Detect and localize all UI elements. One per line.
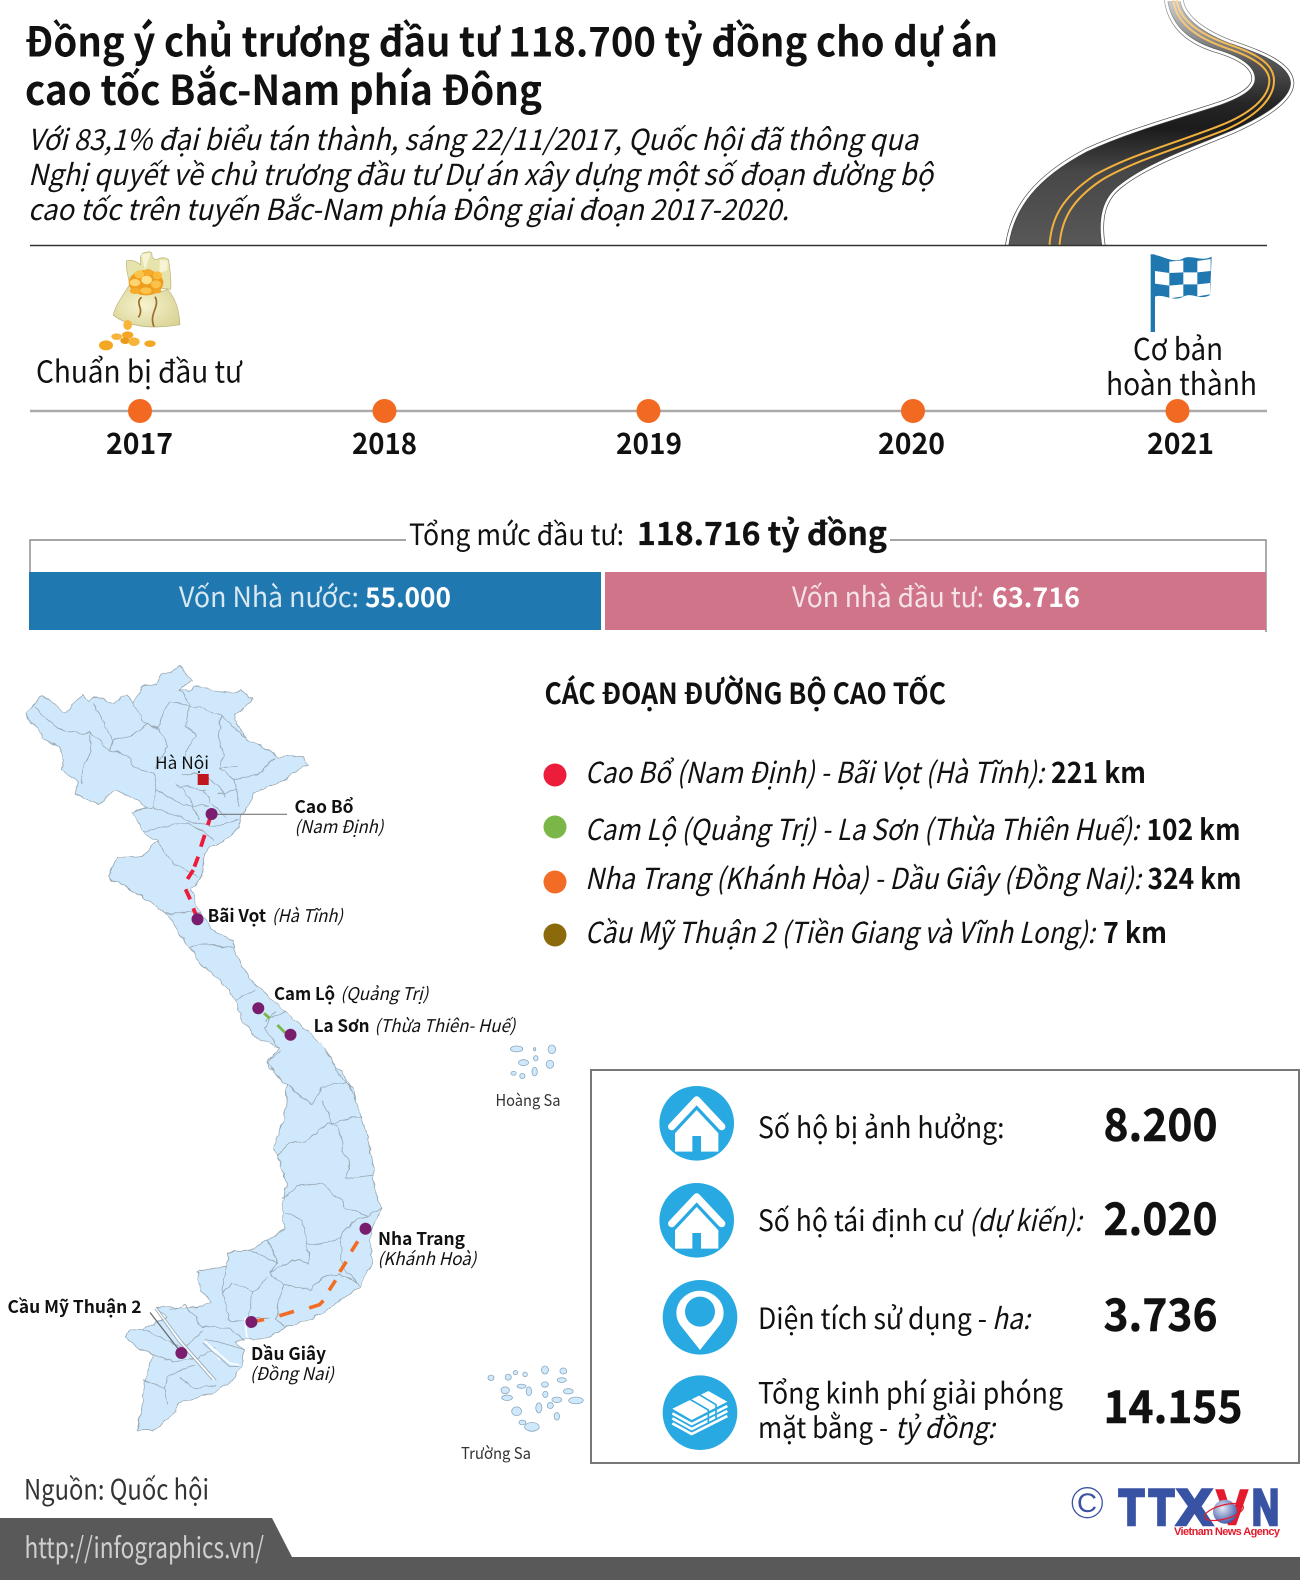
icon: house — [659, 1183, 734, 1258]
label: Hoàng Sa: Hoàng Sa — [496, 1087, 560, 1111]
row: resettled households: Số hộ tái định cư — [758, 1198, 964, 1240]
logo: TTXVN: N — [1252, 1479, 1279, 1535]
timeline dot 2020 — [901, 399, 925, 423]
route: Cam Lộ - La Sơn — [264, 1013, 285, 1033]
copyright mark: C — [1077, 1488, 1097, 1518]
year labels: 2019 — [616, 421, 682, 463]
bar: investor capital: 63.716 — [992, 576, 1080, 615]
Dầu Giây marker — [245, 1316, 335, 1386]
source: Nguồn: Quốc hội — [24, 1468, 209, 1508]
Dầu Giây marker: (Đồng Nai) — [250, 1361, 335, 1386]
Dầu Giây marker: Dầu Giây — [251, 1341, 326, 1366]
map of Vietnam — [8, 666, 583, 1464]
section 1: Cao Bổ (Nam Định) - Bãi Vọt (Hà Tĩnh): — [585, 750, 1046, 792]
Trường Sa islands — [488, 1366, 583, 1431]
year labels: 2018 — [352, 421, 417, 463]
timeline — [30, 399, 1267, 463]
row: clearance cost: tỷ đồng: — [895, 1405, 997, 1447]
row: land area: ha: — [992, 1296, 1032, 1338]
Bãi Vọt marker: (Hà Tĩnh) — [272, 903, 344, 928]
total investment — [29, 509, 1266, 632]
intro text: Nghị quyết về chủ trương đầu tư Dự án xây dựng một số đoạn đường bộ — [28, 152, 935, 194]
map south — [124, 1043, 583, 1431]
logo: TTXVN — [1072, 1479, 1281, 1538]
row: clearance cost: mặt bằng - — [758, 1405, 888, 1447]
Nha Trang marker — [360, 1223, 478, 1271]
logo: TTXVN: Vietnam News Agency — [1174, 1526, 1281, 1538]
row: affected households: Số hộ bị ảnh hưởng: — [758, 1105, 1004, 1147]
icon: house — [659, 1086, 734, 1161]
bar: state capital: Vốn Nhà nước: — [179, 576, 359, 616]
section 3: Nha Trang (Khánh Hòa) - Dầu Giây (Đồng Nai): — [585, 856, 1143, 898]
Nha Trang marker: (Khánh Hoà) — [378, 1246, 478, 1271]
logo: TTXVN: X — [1177, 1479, 1212, 1535]
row: resettled households — [659, 1183, 1218, 1258]
icon: money bag — [99, 252, 180, 350]
icon: winding road — [1007, 0, 1292, 248]
total label: Tổng mức đầu tư: — [409, 512, 624, 554]
Cầu Mỹ Thuận 2 marker — [8, 1294, 187, 1359]
La Sơn marker — [284, 1013, 517, 1041]
total label: 118.716 tỷ đồng — [637, 509, 887, 555]
Hoàng Sa islands — [511, 1045, 556, 1079]
heading: CÁC ĐOẠN ĐƯỜNG BỘ CAO TỐC — [544, 671, 946, 713]
intro text — [28, 117, 935, 229]
row: affected households: 8.200 — [1104, 1089, 1218, 1154]
section 2: Cam Lộ (Quảng Trị) - La Sơn (Thừa Thiên Huế): — [585, 807, 1141, 849]
row: land area: 3.736 — [1104, 1279, 1218, 1344]
label: Trường Sa: Trường Sa — [461, 1440, 531, 1464]
Bãi Vọt marker — [192, 903, 344, 928]
intro text: cao tốc trên tuyến Bắc-Nam phía Đông giai đoạn 2017-2020. — [28, 187, 789, 229]
copyright mark — [1072, 1488, 1102, 1518]
year labels: 2020 — [878, 421, 945, 463]
route: Nha Trang - Dầu Giây — [257, 1241, 358, 1321]
row: land area: Diện tích sử dụng - — [758, 1296, 987, 1338]
Cao Bồ marker — [206, 794, 385, 839]
Cam Lộ marker: (Quảng Trị) — [340, 981, 429, 1006]
header rule — [30, 244, 1267, 246]
icon: checkered flag — [1151, 254, 1212, 332]
bar: state capital — [29, 572, 601, 630]
intro text: Với 83,1% đại biểu tán thành, sáng 22/11/2017, Quốc hội đã thông qua — [28, 117, 920, 159]
section 4: 7 km — [1103, 910, 1167, 952]
label: Cơ bản hoàn thành — [1106, 325, 1257, 404]
Cầu Mỹ Thuận 2 marker: Cầu Mỹ Thuận 2 — [8, 1294, 142, 1319]
timeline dot 2018 — [372, 399, 396, 423]
Hà Nội marker — [155, 749, 209, 785]
logo: TTXVN: T — [1149, 1479, 1174, 1535]
timeline dot 2017 — [128, 399, 152, 423]
Hà Nội marker: Hà Nội — [155, 749, 209, 774]
row: resettled households: 2.020 — [1104, 1183, 1218, 1248]
footer bar: http://infographics.vn/ — [24, 1525, 264, 1567]
Cam Lộ marker — [252, 981, 429, 1014]
icon: location pin — [663, 1280, 737, 1355]
label: Chuẩn bị đầu tư: Chuẩn bị đầu tư — [36, 348, 243, 392]
panel: expressway sections — [544, 671, 1242, 952]
timeline dot 2021 — [1166, 399, 1190, 423]
row: clearance cost: Tổng kinh phí giải phóng — [758, 1370, 1063, 1412]
logo: TTXVN: V — [1216, 1479, 1249, 1535]
section 2: 102 km — [1146, 807, 1240, 849]
footer bar — [0, 1518, 1300, 1580]
year labels: 2021 — [1147, 421, 1214, 463]
title: Đồng ý chủ trương đầu tư 118.700 tỷ đồng cho dự án — [25, 8, 998, 68]
map north — [25, 666, 556, 1110]
La Sơn marker: La Sơn — [314, 1013, 370, 1038]
bar: state capital: 55.000 — [365, 576, 451, 615]
Nha Trang marker: Nha Trang — [378, 1226, 466, 1251]
row: resettled households: (dự kiến): — [969, 1198, 1084, 1240]
Bãi Vọt marker: Bãi Vọt — [208, 903, 267, 928]
section 4: Cầu Mỹ Thuận 2 (Tiền Giang và Vĩnh Long): — [585, 910, 1097, 952]
route: Cao Bồ - Bãi Vọt — [186, 819, 210, 915]
title — [25, 8, 998, 117]
year labels — [106, 421, 1214, 463]
bar: investor capital: Vốn nhà đầu tư: — [792, 576, 984, 616]
row: clearance cost — [663, 1370, 1242, 1450]
row: land area — [663, 1279, 1218, 1355]
Cao Bồ marker: Cao Bổ — [294, 794, 354, 819]
icon: money stack — [663, 1375, 737, 1450]
section 1: 221 km — [1051, 750, 1146, 792]
bar: investor capital — [605, 572, 1266, 630]
row: affected households — [659, 1086, 1218, 1161]
year labels: 2017 — [106, 421, 173, 463]
Cam Lộ marker: Cam Lộ — [274, 981, 335, 1006]
Cao Bồ marker: (Nam Định) — [294, 814, 385, 839]
timeline dot 2019 — [636, 399, 660, 423]
Mekong rivers — [155, 1309, 247, 1380]
row: clearance cost: 14.155 — [1104, 1371, 1242, 1436]
total label — [409, 509, 887, 555]
label: Cơ bản hoàn thành: hoàn thành — [1106, 360, 1257, 404]
bracket — [30, 540, 1266, 632]
label: Cơ bản hoàn thành: Cơ bản — [1133, 325, 1223, 369]
panel: key figures — [591, 1070, 1299, 1463]
title: cao tốc Bắc-Nam phía Đông — [25, 57, 542, 117]
section 3: 324 km — [1148, 856, 1242, 898]
logo: TTXVN: T — [1119, 1479, 1144, 1535]
La Sơn marker: (Thừa Thiên- Huế) — [374, 1013, 517, 1038]
